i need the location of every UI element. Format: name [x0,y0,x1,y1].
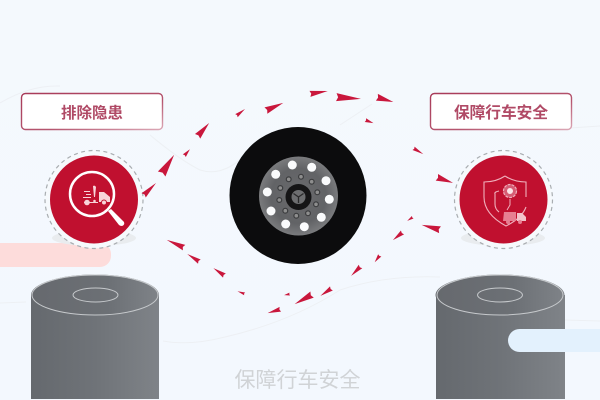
icon: target [504,184,516,198]
label: 保障行车安全 [430,94,572,130]
bottom caption: 保障行车安全 [234,369,360,392]
icon: truck with warning mark [83,186,110,205]
wheel bolts [277,174,320,218]
blue accent bar [508,329,600,352]
paper plane arc: upper [142,88,454,197]
label: 排除隐患: 排除隐患 [61,103,123,122]
rim [259,156,338,236]
hub [286,184,312,210]
icon badge: safety shield [454,150,552,248]
label: 排除隐患 [22,94,162,130]
wheel [230,127,366,264]
left cylinder [31,274,159,399]
paper plane arc: lower [166,216,441,315]
icon: truck [503,212,526,224]
tire [230,127,366,264]
label: 保障行车安全: 保障行车安全 [454,103,548,122]
pink accent bar [0,243,111,267]
right cylinder [436,274,565,399]
rim holes [263,160,334,231]
icon badge: inspection magnifier [45,150,143,248]
